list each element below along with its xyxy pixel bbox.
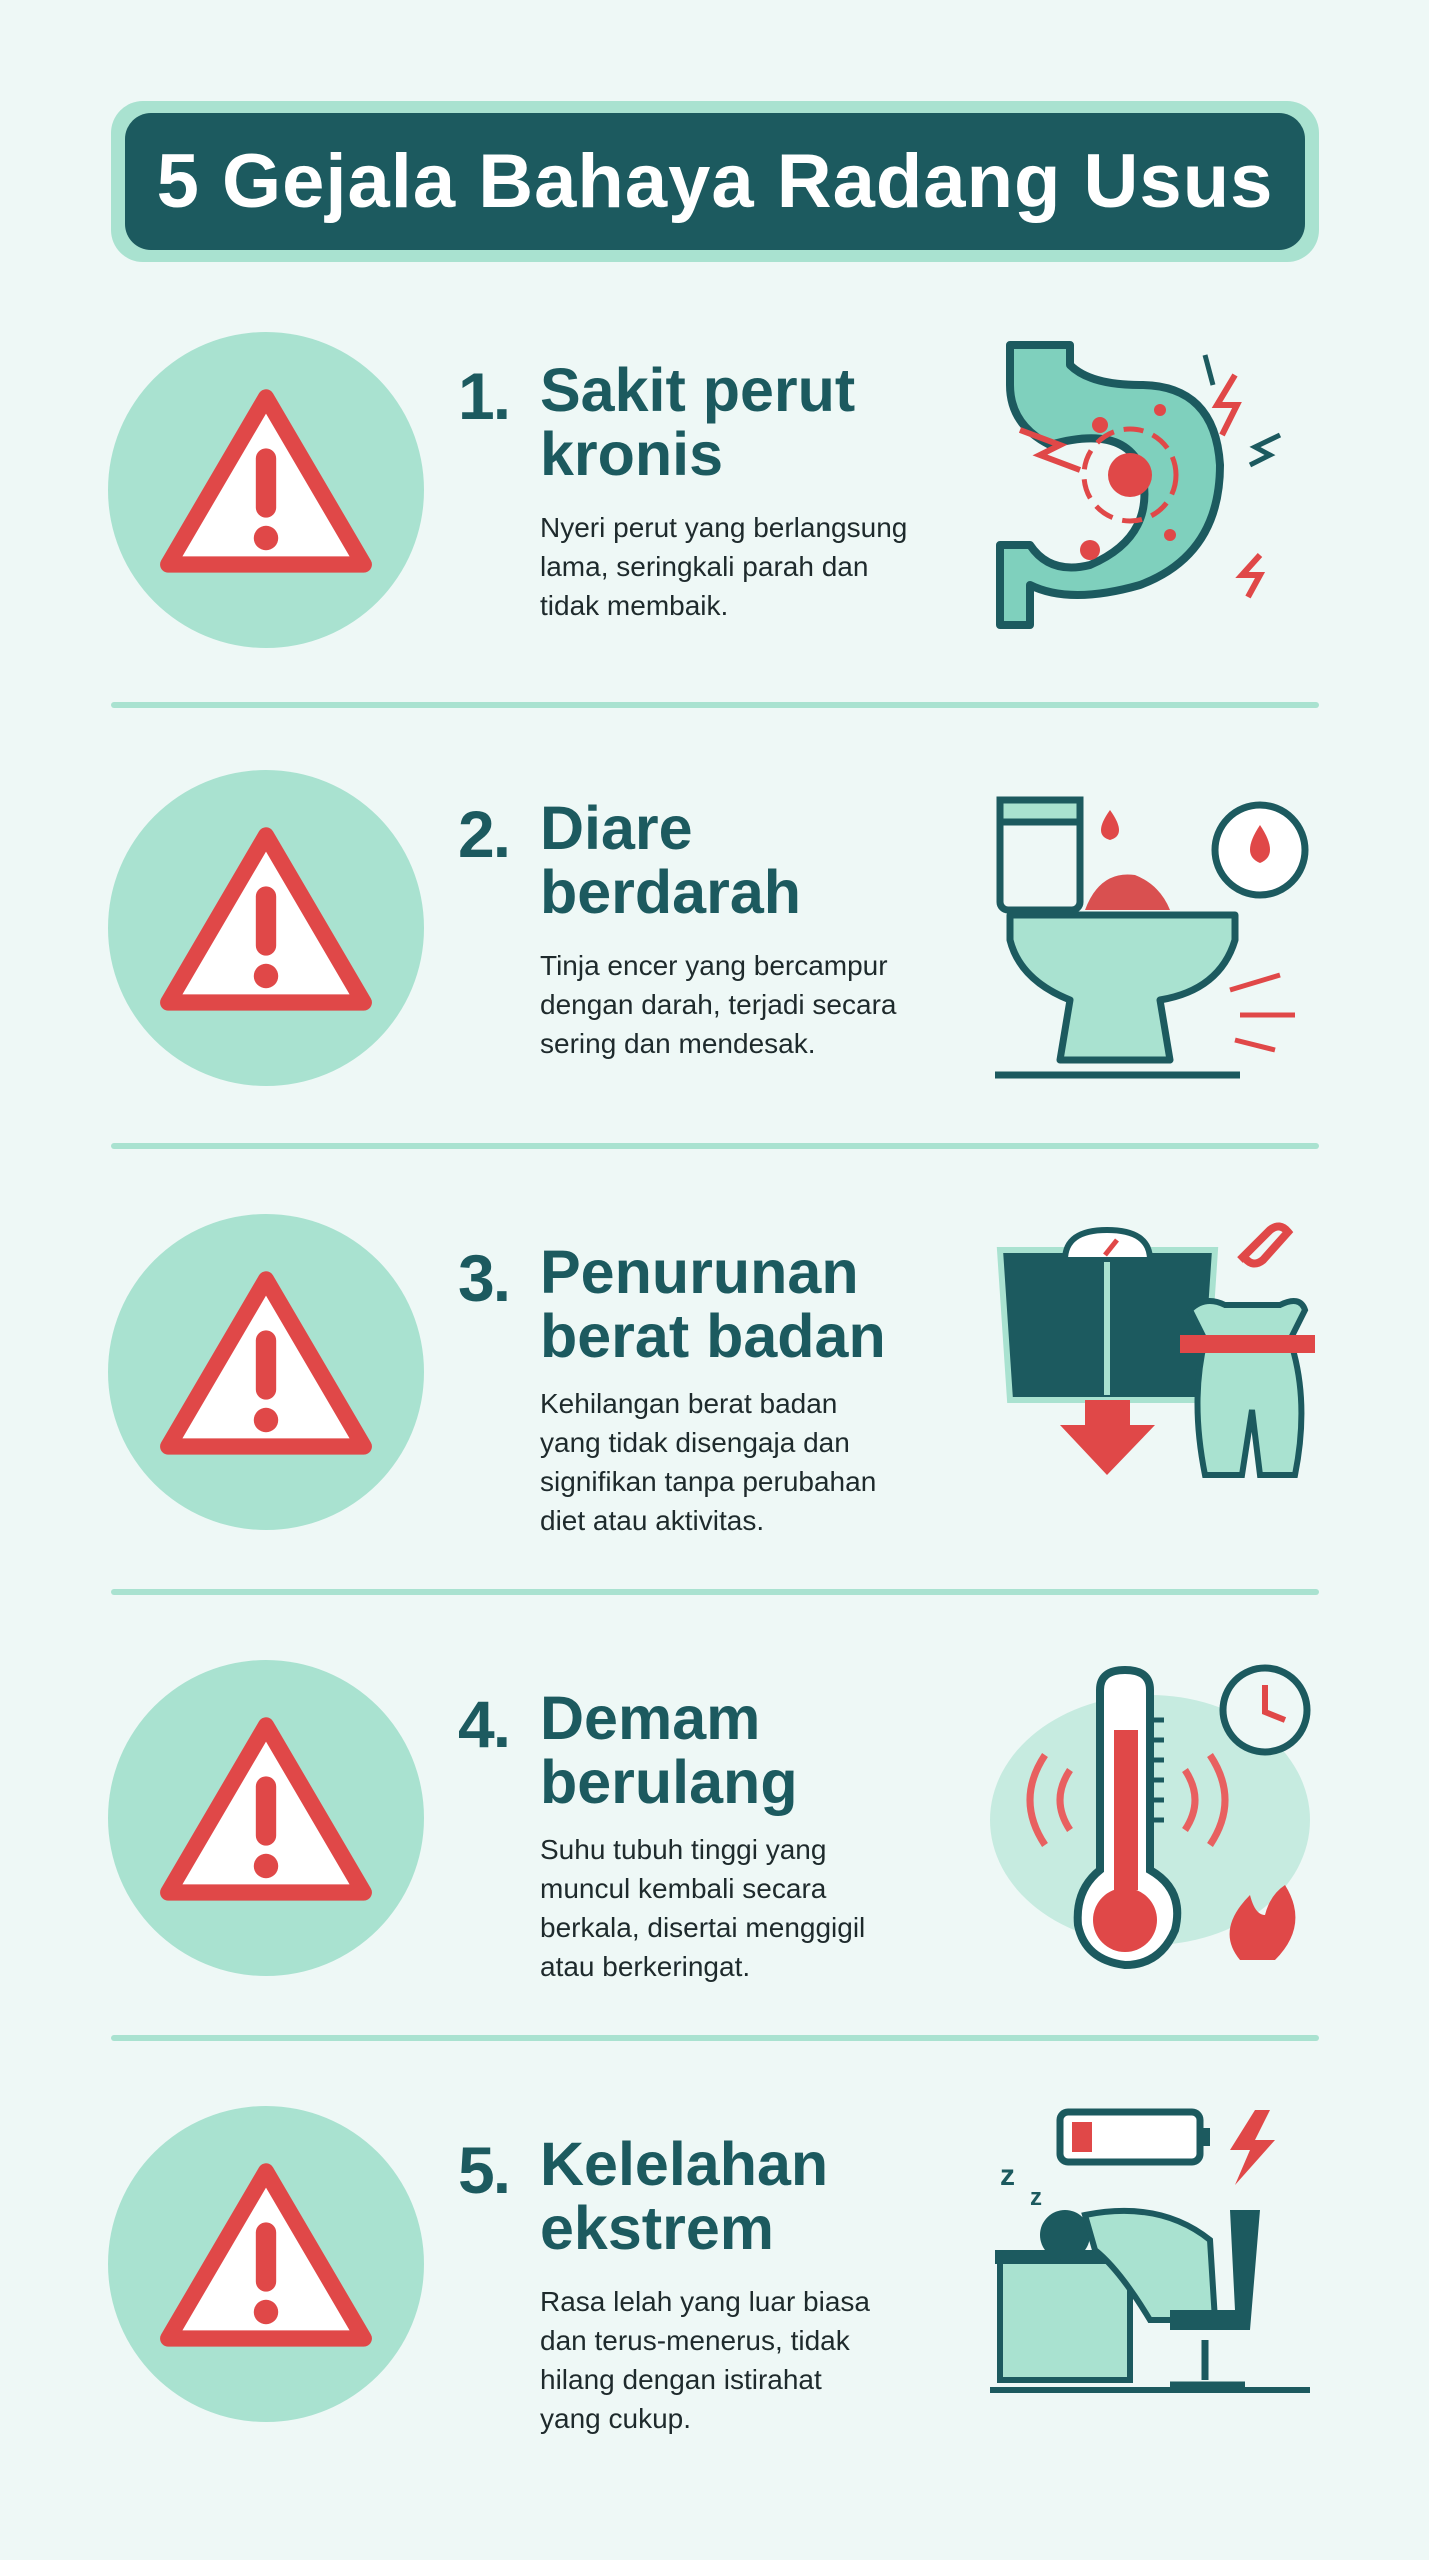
text 3: diet atau aktivitas. [540,1505,764,1536]
icon: thermometer [990,1664,1310,1969]
text 2: dengan darah, terjadi secara [540,989,896,1020]
text 4 [540,1834,865,1982]
icon: scale [996,1222,1315,1478]
heading 5 [458,2130,828,2262]
text 3: signifikan tanpa perubahan [540,1466,876,1497]
icon: warning circle [108,770,424,1086]
text 2: sering dan mendesak. [540,1028,816,1059]
text 3: Kehilangan berat badan [540,1388,837,1419]
heading 1 [458,356,855,488]
heading 1: 1. [458,359,509,433]
text 4: atau berkeringat. [540,1951,750,1982]
heading 3: berat badan [540,1302,886,1370]
text 4: berkala, disertai menggigil [540,1912,865,1943]
text 2 [540,950,896,1059]
text 2: Tinja encer yang bercampur [540,950,888,981]
section 3 [108,1214,886,1536]
heading 5: Kelelahan [540,2130,828,2198]
icon: tired worker [990,2108,1310,2393]
text 5: dan terus-menerus, tidak [540,2325,850,2356]
heading 4: 4. [458,1687,509,1761]
text 1 [540,512,907,621]
icon: tired worker: z [1000,2159,1015,2192]
text 3 [540,1388,876,1536]
heading 1: kronis [540,420,723,488]
text 1: Nyeri perut yang berlangsung [540,512,907,543]
text 5: hilang dengan istirahat [540,2364,822,2395]
text 1: tidak membaik. [540,590,728,621]
title banner: 5 Gejala Bahaya Radang Usus [157,139,1273,224]
text 3: yang tidak disengaja dan [540,1427,850,1458]
text 1: lama, seringkali parah dan [540,551,868,582]
heading 4: berulang [540,1748,798,1816]
text 4: Suhu tubuh tinggi yang [540,1834,826,1865]
section 2 [108,770,896,1086]
heading 2: 2. [458,797,509,871]
text 5: Rasa lelah yang luar biasa [540,2286,870,2317]
icon: warning circle [108,2106,424,2422]
heading 2: Diare [540,794,693,862]
icon: warning circle [108,332,424,648]
icon: toilet [995,796,1308,1078]
section 4 [108,1660,865,1982]
heading 2 [458,794,801,926]
section 1 [108,332,907,648]
heading 3: 3. [458,1241,509,1315]
text 5: yang cukup. [540,2403,691,2434]
heading 1: Sakit perut [540,356,855,424]
icon: tired worker: z [1030,2184,1042,2211]
icon: stomach [996,341,1281,629]
heading 3 [458,1238,886,1370]
icon: warning circle [108,1214,424,1530]
icon: warning circle [108,1660,424,1976]
heading 4: Demam [540,1684,760,1752]
heading 3: Penurunan [540,1238,859,1306]
heading 5: 5. [458,2133,509,2207]
heading 4 [458,1684,798,1816]
section 5 [108,2106,870,2434]
heading 2: berdarah [540,858,801,926]
title banner [111,101,1319,262]
text 4: muncul kembali secara [540,1873,826,1904]
heading 5: ekstrem [540,2194,774,2262]
text 5 [540,2286,870,2434]
